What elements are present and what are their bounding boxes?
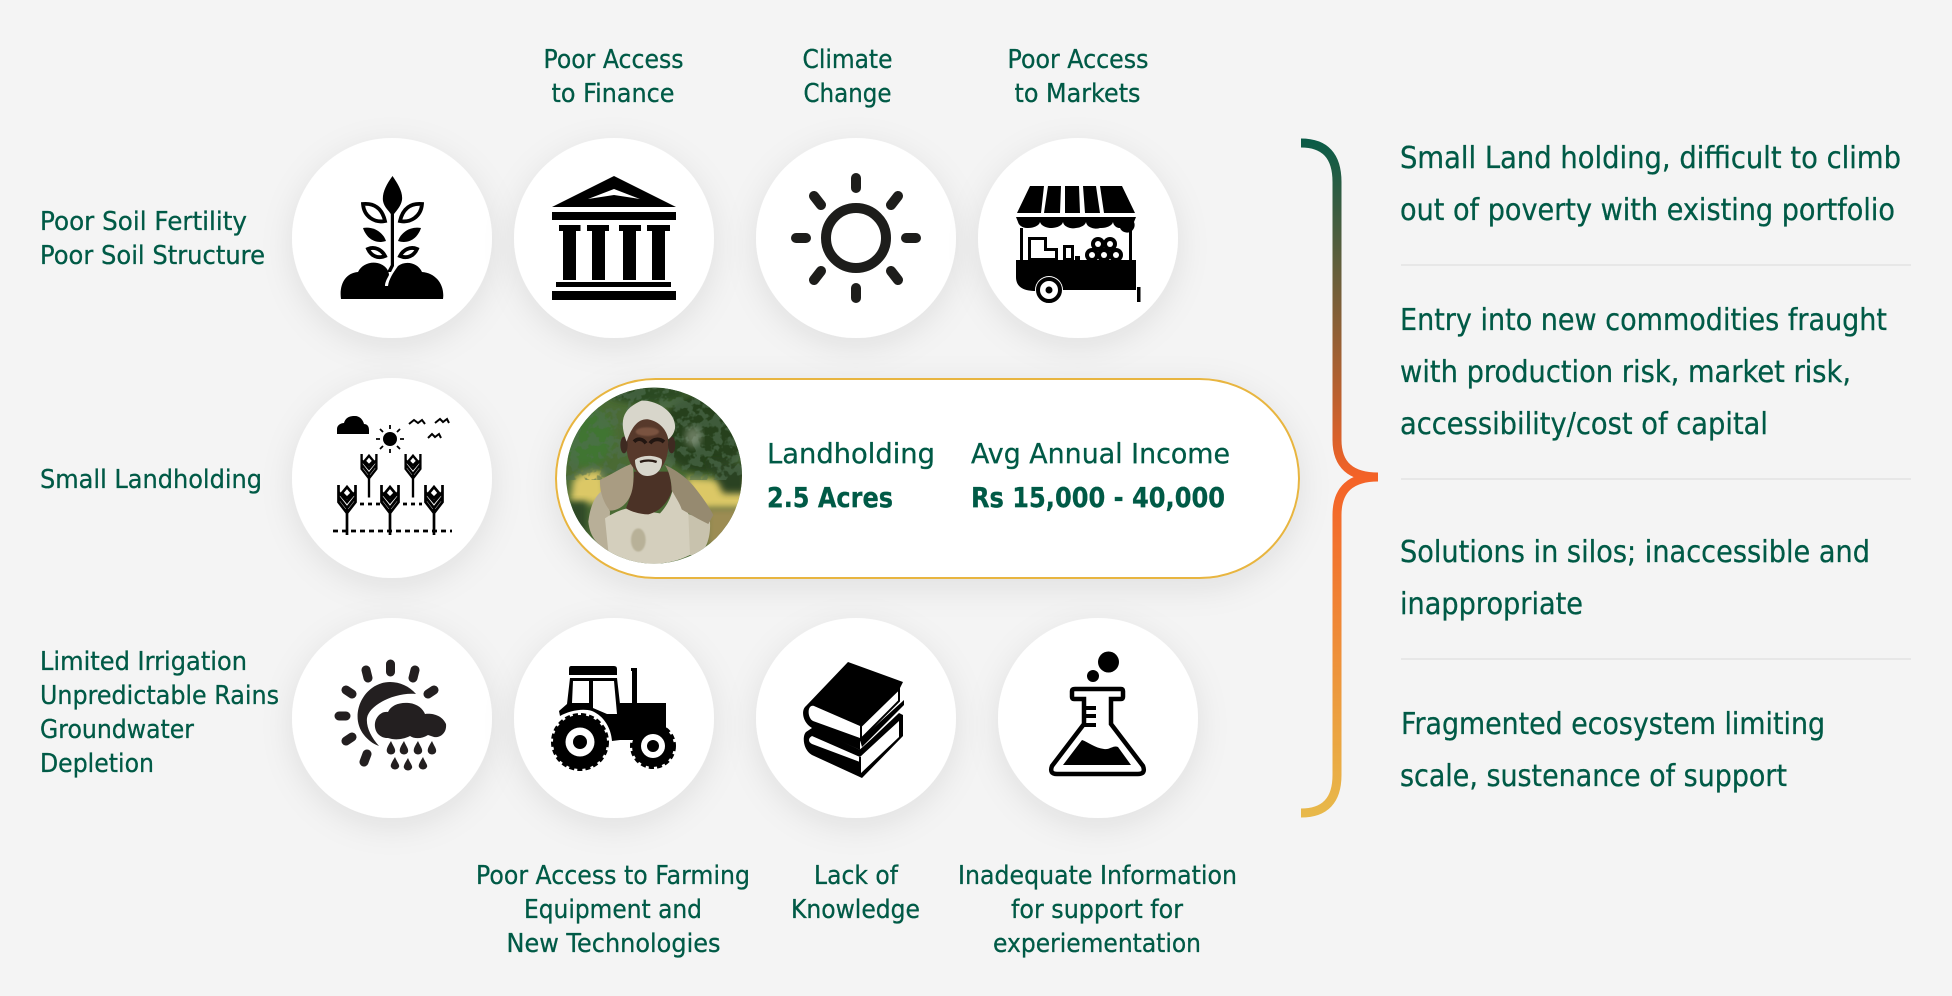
label: lack of knowledge: Knowledge	[791, 895, 920, 925]
head	[626, 419, 668, 474]
label: water	[40, 647, 279, 779]
icon circle: tractor	[514, 618, 714, 818]
chest	[626, 472, 672, 514]
text: small land holding: out of poverty with existing portfolio	[1400, 193, 1895, 228]
panel: farmer profile pill	[556, 379, 1299, 580]
gradient brace	[1301, 143, 1378, 813]
text: entry into new commodities: with production risk, market risk,	[1400, 355, 1851, 390]
text: solutions in silos: inappropriate	[1400, 587, 1583, 622]
label: lack of knowledge: Lack of	[814, 861, 899, 891]
icon circle: sun	[756, 138, 956, 338]
label: farming equipment: New Technologies	[506, 929, 720, 959]
label: farming equipment	[476, 861, 750, 959]
text: entry into new commodities: Entry into new commodities fraught	[1400, 303, 1887, 338]
label: small landholding: Small Landholding	[40, 465, 262, 495]
icon circle: flask	[998, 618, 1198, 818]
scarf	[600, 463, 633, 511]
text: solutions in silos: Solutions in silos; inaccessible and	[1400, 535, 1870, 570]
text: small land holding	[1400, 141, 1901, 228]
text: entry into new commodities: accessibility/cost of capital	[1400, 407, 1768, 442]
label: lack of knowledge	[791, 861, 920, 925]
label: inadequate information: for support for	[1011, 895, 1183, 925]
stat: landholding: 2.5 Acres	[767, 482, 893, 514]
text: fragmented ecosystem	[1400, 707, 1825, 794]
label: poor access to finance: to Finance	[552, 79, 674, 109]
label: farming equipment: Poor Access to Farming	[476, 861, 750, 891]
icon circle: plant in soil	[292, 138, 492, 338]
label: soil	[40, 207, 265, 271]
text: solutions in silos	[1400, 535, 1870, 622]
label: inadequate information: Inadequate Information	[958, 861, 1237, 891]
label: poor access to markets	[1008, 45, 1148, 109]
label: inadequate information	[958, 861, 1237, 959]
stat: landholding: Landholding	[767, 438, 935, 470]
icon circle: sun and rain	[292, 618, 492, 818]
label: poor access to finance: Poor Access	[544, 45, 684, 75]
icon circle: market stall	[978, 138, 1178, 338]
label: poor access to markets: to Markets	[1014, 79, 1140, 109]
icon circle: books	[756, 618, 956, 818]
arms and shirt	[588, 490, 610, 552]
stat: average annual income	[971, 438, 1230, 514]
stat: average annual income: Avg Annual Income	[971, 438, 1230, 470]
label: soil: Poor Soil Fertility	[40, 207, 247, 237]
photo: smiling farmer	[566, 388, 742, 564]
label: climate change: Change	[804, 79, 892, 109]
stat: landholding	[767, 438, 935, 514]
icon circle: wheat field	[292, 378, 492, 578]
text: fragmented ecosystem: Fragmented ecosystem limiting	[1401, 707, 1825, 742]
label: water: Depletion	[40, 749, 154, 779]
label: inadequate information: experiementation	[993, 929, 1201, 959]
label: climate change	[802, 45, 892, 109]
label: poor access to finance	[544, 45, 684, 109]
label: water: Limited Irrigation	[40, 647, 247, 677]
label: soil: Poor Soil Structure	[40, 241, 265, 271]
icon circle: bank	[514, 138, 714, 338]
text: fragmented ecosystem: scale, sustenance of support	[1400, 759, 1787, 794]
label: water: Unpredictable Rains	[40, 681, 279, 711]
label: climate change: Climate	[802, 45, 892, 75]
label: water: Groundwater	[40, 715, 194, 745]
label: farming equipment: Equipment and	[524, 895, 702, 925]
text: entry into new commodities	[1400, 303, 1887, 442]
text: small land holding: Small Land holding, difficult to climb	[1400, 141, 1901, 176]
label: poor access to markets: Poor Access	[1008, 45, 1148, 75]
stat: average annual income: Rs 15,000 - 40,000	[971, 482, 1225, 514]
